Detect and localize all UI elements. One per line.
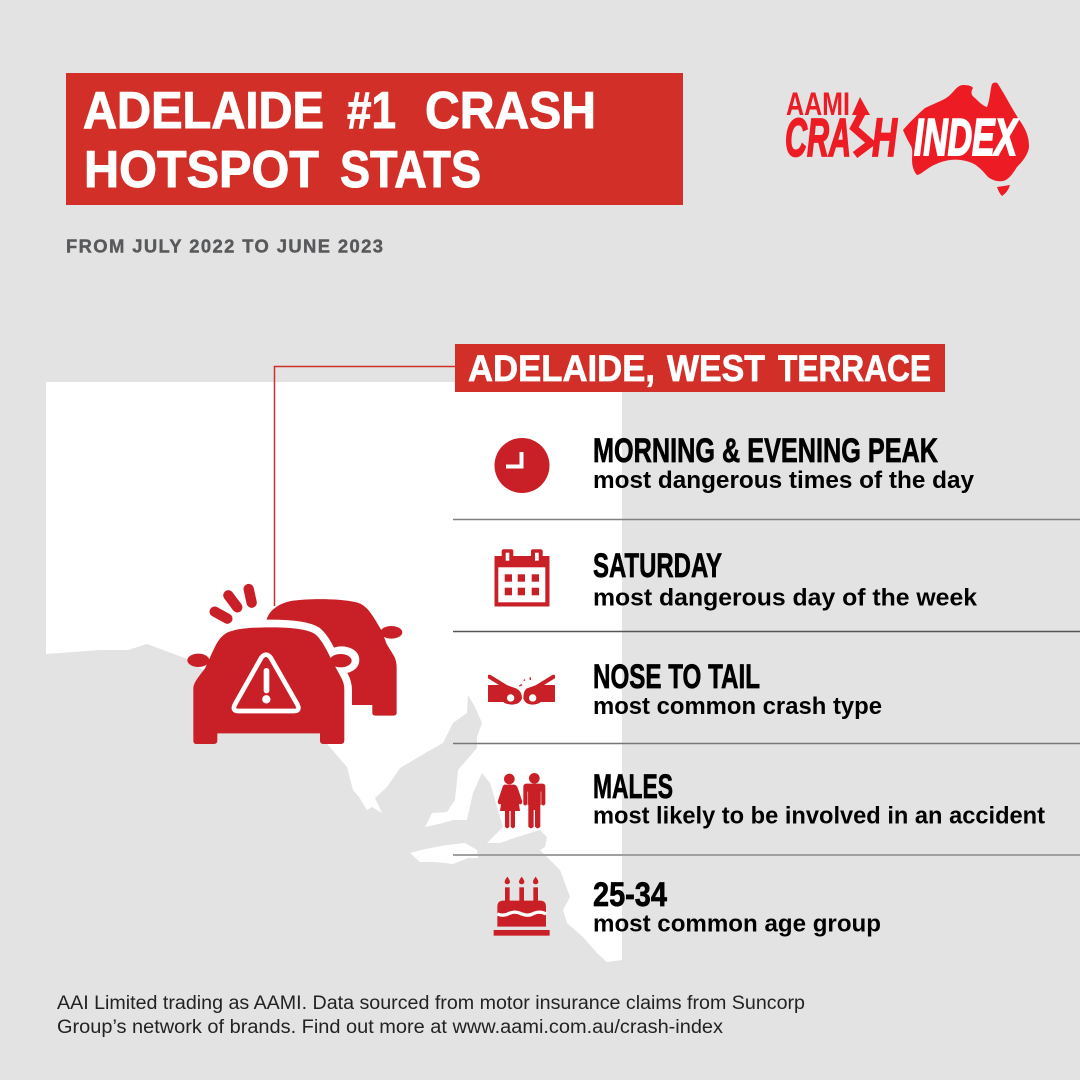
map: South Australia [46, 382, 622, 962]
row: crash type: most common crash type [593, 693, 882, 720]
row: gender: most likely to be involved in an accident [593, 802, 1045, 830]
logo: AAMI Crash Index: H [872, 108, 898, 168]
icon: female and male figures [498, 773, 545, 828]
subtitle: date range: FROM JULY 2022 TO JUNE 2023 [66, 236, 383, 257]
logo: AAMI Crash Index: CRA [785, 108, 851, 168]
location tag: TERRACE [778, 347, 931, 389]
title banner: #1 [347, 81, 396, 139]
location tag: WEST [667, 347, 765, 389]
icon: calendar [494, 549, 550, 606]
row: gender [498, 768, 1045, 830]
row: gender: MALES [593, 768, 673, 806]
row: time of day [494, 432, 975, 494]
front car [187, 627, 352, 744]
title banner: CRASH [425, 81, 596, 139]
row: crash type [488, 658, 882, 720]
icon: clock [494, 438, 550, 493]
logo: AAMI Crash Index [785, 82, 1029, 196]
row: time of day: most dangerous times of the day [593, 467, 975, 494]
location tag [455, 344, 945, 392]
footer note: Group’s network of brands. Find out more at www.aami.com.au/crash-index [57, 1017, 724, 1038]
rear car [267, 599, 402, 716]
row: age group [494, 876, 881, 938]
row: crash type: NOSE TO TAIL [593, 658, 760, 696]
footer note: AAI Limited trading as AAMI. Data sourced from motor insurance claims from Suncorp [57, 993, 805, 1014]
title banner: ADELAIDE [83, 81, 324, 139]
title banner: STATS [340, 140, 481, 198]
location tag: ADELAIDE, [468, 347, 655, 389]
icon: nose to tail collision [488, 675, 555, 705]
callout leader line [274, 366, 455, 606]
icon: birthday cake [494, 877, 550, 936]
row: time of day: MORNING & EVENING PEAK [593, 432, 938, 470]
row: day of week [494, 547, 978, 612]
white outline between cars [266, 620, 360, 705]
logo: AAMI Crash Index: INDEX [914, 109, 1019, 167]
row: day of week: most dangerous day of the week [593, 584, 978, 612]
impact marks [215, 589, 252, 619]
footer note [57, 993, 805, 1038]
warning triangle [234, 655, 298, 711]
row: age group: most common age group [593, 911, 881, 938]
logo: AAMI Crash Index: AAMI [786, 86, 850, 122]
title banner [66, 73, 683, 205]
row: age group: 25-34 [593, 876, 667, 914]
row: day of week: SATURDAY [593, 547, 722, 585]
icon: crashed cars with warning [187, 589, 402, 744]
title banner: HOTSPOT [84, 140, 319, 198]
